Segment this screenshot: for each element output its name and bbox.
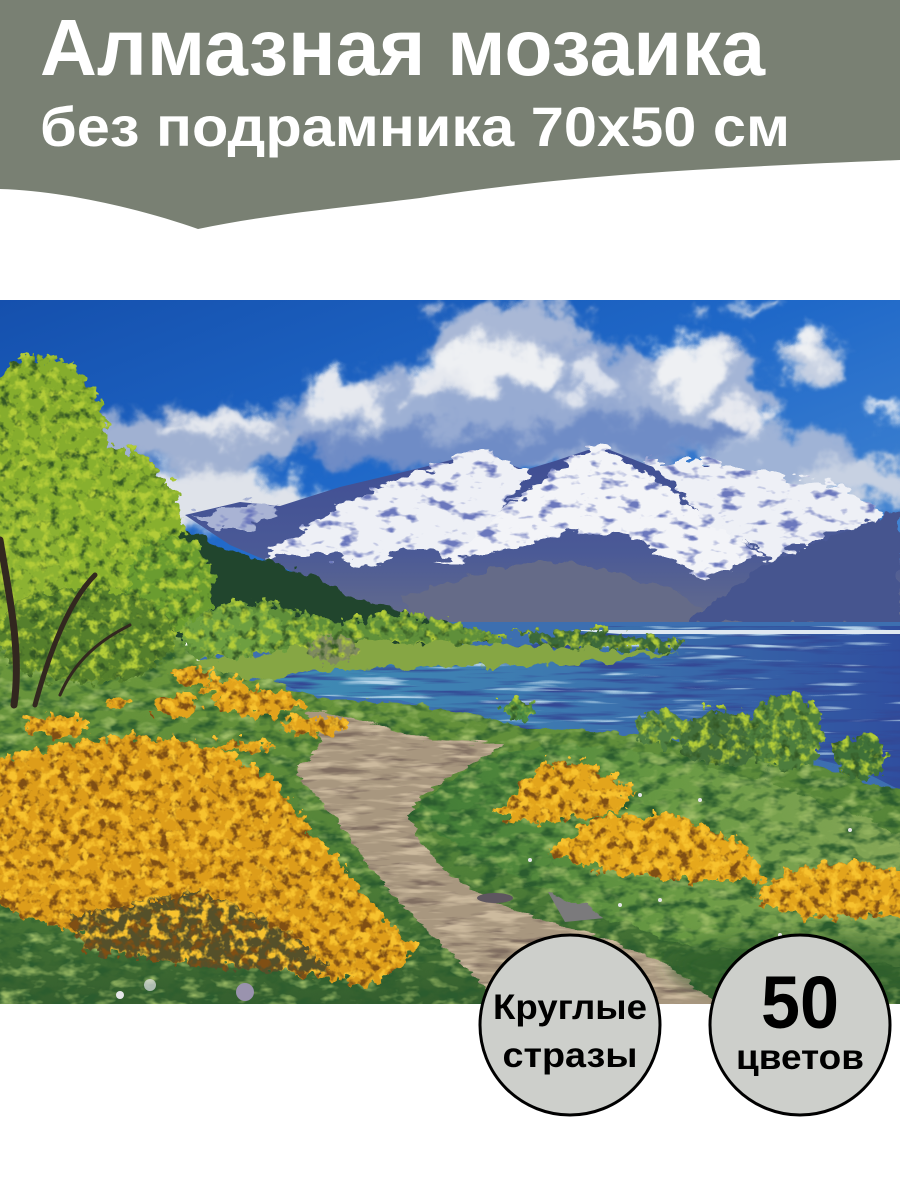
- far right ridge: [685, 510, 900, 625]
- sky: [0, 300, 900, 640]
- right meadow: [410, 745, 900, 975]
- lake base: [200, 622, 900, 802]
- badge: round rhinestones: стразы: [502, 1036, 638, 1075]
- small yellow bushes upper meadow: [21, 667, 349, 751]
- title: Алмазная мозаика: [40, 3, 765, 92]
- header banner: [0, 0, 900, 229]
- right meadow dark lower band: [670, 935, 900, 995]
- conifer forest: [172, 530, 493, 646]
- far shore trees: [180, 600, 680, 662]
- large yellow bush: [0, 735, 415, 985]
- tree trunks: [0, 540, 130, 705]
- snowy mountains: [185, 442, 900, 625]
- badge: 50 colours: 50: [761, 961, 839, 1044]
- landscape painting: [0, 300, 900, 1060]
- left tree foliage: [0, 356, 290, 705]
- clouds: [80, 300, 900, 530]
- lake highlights: [570, 630, 900, 634]
- foreground ground: [0, 636, 900, 1004]
- badge: 50 colours: цветов: [736, 1038, 864, 1077]
- subtitle: без подрамника 70х50 см: [40, 95, 790, 158]
- badge: 50 colours: [710, 935, 890, 1115]
- dirt path: [296, 710, 712, 1004]
- path stones: [477, 892, 605, 922]
- right yellow bushes: [490, 760, 900, 918]
- lake: [270, 626, 900, 800]
- badge: round rhinestones: Круглые: [493, 988, 647, 1027]
- lakeside shrubs: [309, 634, 886, 779]
- badge: round rhinestones: [480, 935, 660, 1115]
- near shore meadow: [198, 638, 680, 681]
- foreground wildflowers: [116, 793, 852, 1001]
